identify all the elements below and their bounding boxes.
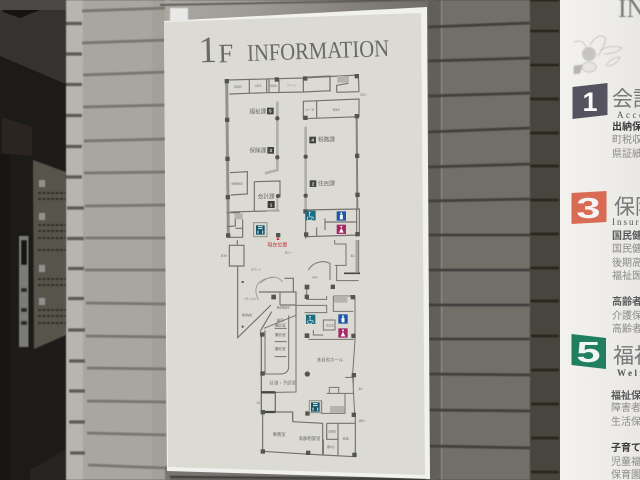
dark gap between wall and directory sign [530, 0, 561, 480]
dark elevator lobby background [0, 0, 68, 480]
icon: men's toilet [337, 211, 346, 221]
section number signs: 3 [269, 148, 272, 153]
room labels: lower section: 歯科 [277, 318, 284, 323]
room labels: upper section: 相談室1 [234, 84, 243, 88]
room labels: lower section: 計測・予診室 [270, 379, 296, 386]
title: 1F INFORMATION: 1 [198, 30, 218, 71]
floor plan: lower section [221, 240, 366, 457]
icon: wheelchair toilet [306, 211, 316, 221]
room labels: upper section: コピー室 [305, 108, 315, 112]
room labels: lower section: リサイクル [243, 297, 257, 301]
room labels: lower section: 会議 [343, 435, 349, 440]
section number signs: 4 [311, 138, 314, 143]
section number signs: 5 [269, 109, 272, 114]
section number signs: 2 [312, 181, 315, 186]
icon: elevator [309, 401, 321, 413]
section 1: accounting [572, 83, 640, 160]
section 5: welfare [572, 334, 640, 480]
room labels: lower section: 多目的ホール [317, 357, 344, 364]
room labels: lower section: 撮影室 [275, 323, 286, 328]
room labels: lower section: 撮影室 [275, 332, 286, 337]
room labels: upper section: 住民課 [318, 179, 335, 187]
room labels: upper section: 相談室 [270, 83, 278, 87]
current location marker [276, 237, 280, 240]
section 5: welfare: 5 [576, 336, 601, 368]
room labels: lower section: 東口 [359, 387, 364, 391]
room labels: upper section: 税務課 [318, 136, 335, 144]
room labels: upper section: 公用室 [254, 84, 262, 88]
section 3: insurance: 3 [576, 192, 601, 224]
room labels: upper section: 会計課 [258, 193, 275, 201]
room labels: lower section: ATM [312, 276, 317, 280]
room labels: lower section: 通用口 [359, 418, 366, 422]
icon: elevator [254, 223, 267, 237]
left brick wall [66, 0, 170, 480]
room labels: lower section: 東口 [351, 253, 356, 257]
right brick wall [426, 0, 531, 480]
room labels: lower section: 資料室 [327, 445, 335, 449]
icon: men's toilet [338, 314, 348, 324]
room labels: upper section: 保健情報室 [231, 181, 244, 185]
directory plate on lobby wall [33, 160, 66, 349]
room labels: upper section: 保険課 [249, 146, 267, 154]
section 3: insurance [572, 191, 640, 335]
icon: wheelchair toilet [306, 315, 315, 324]
room labels: lower section: 保健福祉 [242, 313, 253, 317]
icon: women's toilet [338, 328, 348, 338]
flower sketch [574, 36, 622, 74]
room labels: lower section: 西口 [257, 400, 262, 404]
acrylic floor guide panel [164, 7, 430, 479]
room labels: upper section: 書庫室 [333, 108, 340, 112]
room labels: upper section: ラウンジ [287, 83, 297, 87]
room labels: lower section: 事務室 [273, 431, 286, 438]
room labels: lower section: ロビー [285, 251, 293, 255]
section number signs [267, 108, 316, 208]
section number signs: 1 [270, 202, 273, 207]
icon: women's toilet [337, 225, 346, 234]
room labels: lower section: 倉庫室 [328, 429, 337, 433]
current location label: 現在位置 [267, 242, 287, 249]
section 1: accounting: 1 [582, 87, 598, 117]
room labels: lower section: 撮影室 [275, 346, 286, 351]
room labels: lower section: ラウンジ [251, 267, 262, 271]
room labels: upper section: 非常口 [360, 93, 366, 97]
title: 1F INFORMATION: INFORMATION [247, 36, 389, 67]
room labels: lower section: 保健相談室 [277, 306, 290, 310]
room labels: lower section: 高齢相談室 [299, 435, 321, 442]
wall above and below the sign [160, 0, 435, 480]
title: 1F INFORMATION: F [218, 38, 234, 68]
room labels: lower section: 待合室 [326, 324, 334, 328]
title: 1F INFORMATION [198, 30, 389, 71]
room labels: upper section: 福祉課 [249, 107, 267, 115]
elevator call panel [19, 236, 28, 347]
room labels: upper section [231, 83, 366, 201]
directory sign at right [560, 0, 640, 480]
room labels: lower section [221, 251, 366, 449]
room labels: lower section: 第1駐 [221, 254, 228, 258]
floor plan: upper section [225, 74, 366, 240]
